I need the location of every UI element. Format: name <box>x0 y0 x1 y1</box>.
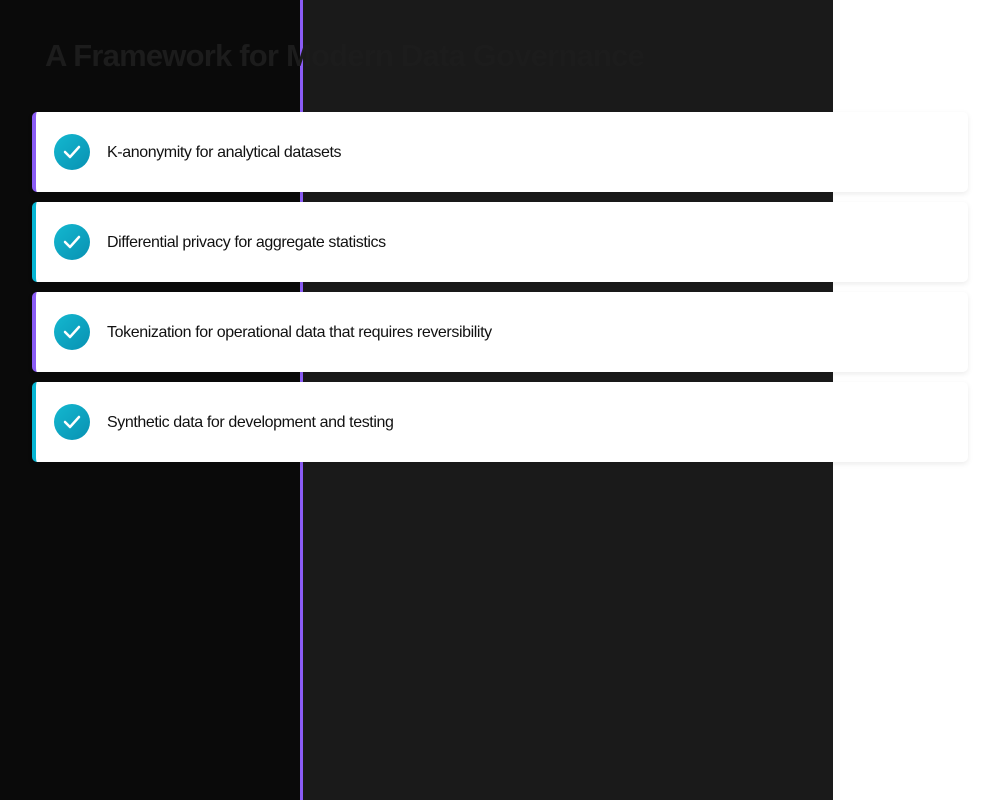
text: Synthetic data for development and testing <box>107 414 394 431</box>
icon: check <box>54 134 90 170</box>
card: k-anonymity <box>32 112 968 192</box>
text: Tokenization for operational data that requires reversibility <box>107 324 492 341</box>
icon: check <box>54 224 90 260</box>
text: K-anonymity for analytical datasets <box>107 144 341 161</box>
card: differential privacy <box>32 202 968 282</box>
title: A Framework for Modern Data Governance <box>45 38 644 73</box>
icon: check <box>54 314 90 350</box>
card: tokenization <box>32 292 968 372</box>
card: synthetic data <box>32 382 968 462</box>
text: Differential privacy for aggregate statistics <box>107 234 386 251</box>
icon: check <box>54 404 90 440</box>
